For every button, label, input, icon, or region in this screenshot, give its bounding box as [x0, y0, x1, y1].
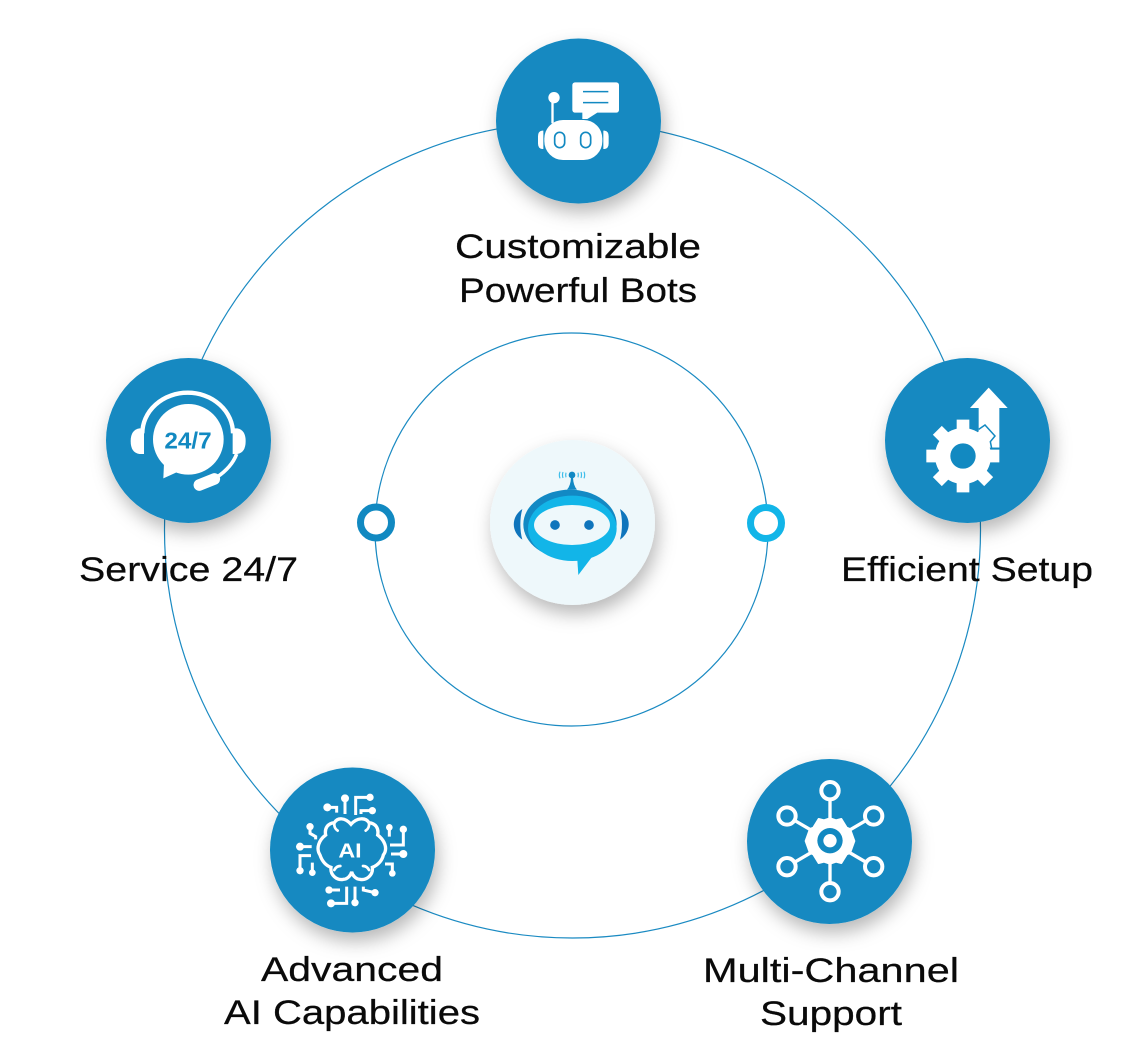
badge circle — [270, 768, 435, 932]
badge circle — [496, 38, 661, 204]
badge circle — [747, 759, 912, 924]
label: Efficient Setup — [841, 551, 1093, 589]
center panel: robot logo — [490, 440, 655, 605]
icon: headset with 24/7 bubble — [131, 393, 246, 485]
inner orbit ring — [375, 333, 768, 726]
icon: robot chat head — [514, 472, 629, 575]
panel: efficient setup — [841, 358, 1093, 589]
center disc — [490, 440, 655, 605]
label — [224, 951, 480, 1032]
label: Customizable — [455, 228, 701, 266]
label: AI Capabilities — [224, 994, 480, 1032]
icon: AI brain circuit — [296, 794, 407, 907]
icon: headset with 24/7 bubble: 24/7 — [164, 428, 212, 454]
panel: advanced ai capabilities — [224, 768, 480, 1032]
panel: multi-channel support — [703, 759, 959, 1033]
icon: AI brain circuit: AI — [338, 840, 362, 862]
right ring marker — [750, 508, 782, 538]
panel: service 24/7 — [79, 358, 298, 589]
icon: gear with up arrow — [926, 388, 1008, 492]
left ring marker — [360, 507, 392, 538]
panel: customizable powerful bots — [455, 38, 701, 310]
label — [703, 952, 959, 1033]
icon: robot with speech bubble — [538, 82, 619, 160]
icon: hub network with gear — [778, 782, 882, 900]
label: Multi-Channel — [703, 952, 959, 990]
badge circle — [106, 358, 271, 523]
label: Support — [760, 995, 903, 1033]
outer orbit ring — [164, 122, 980, 938]
label — [455, 228, 701, 310]
badge circle — [885, 358, 1050, 523]
label: Powerful Bots — [459, 272, 697, 310]
label: Service 24/7 — [79, 551, 298, 589]
label: Advanced — [261, 951, 443, 989]
